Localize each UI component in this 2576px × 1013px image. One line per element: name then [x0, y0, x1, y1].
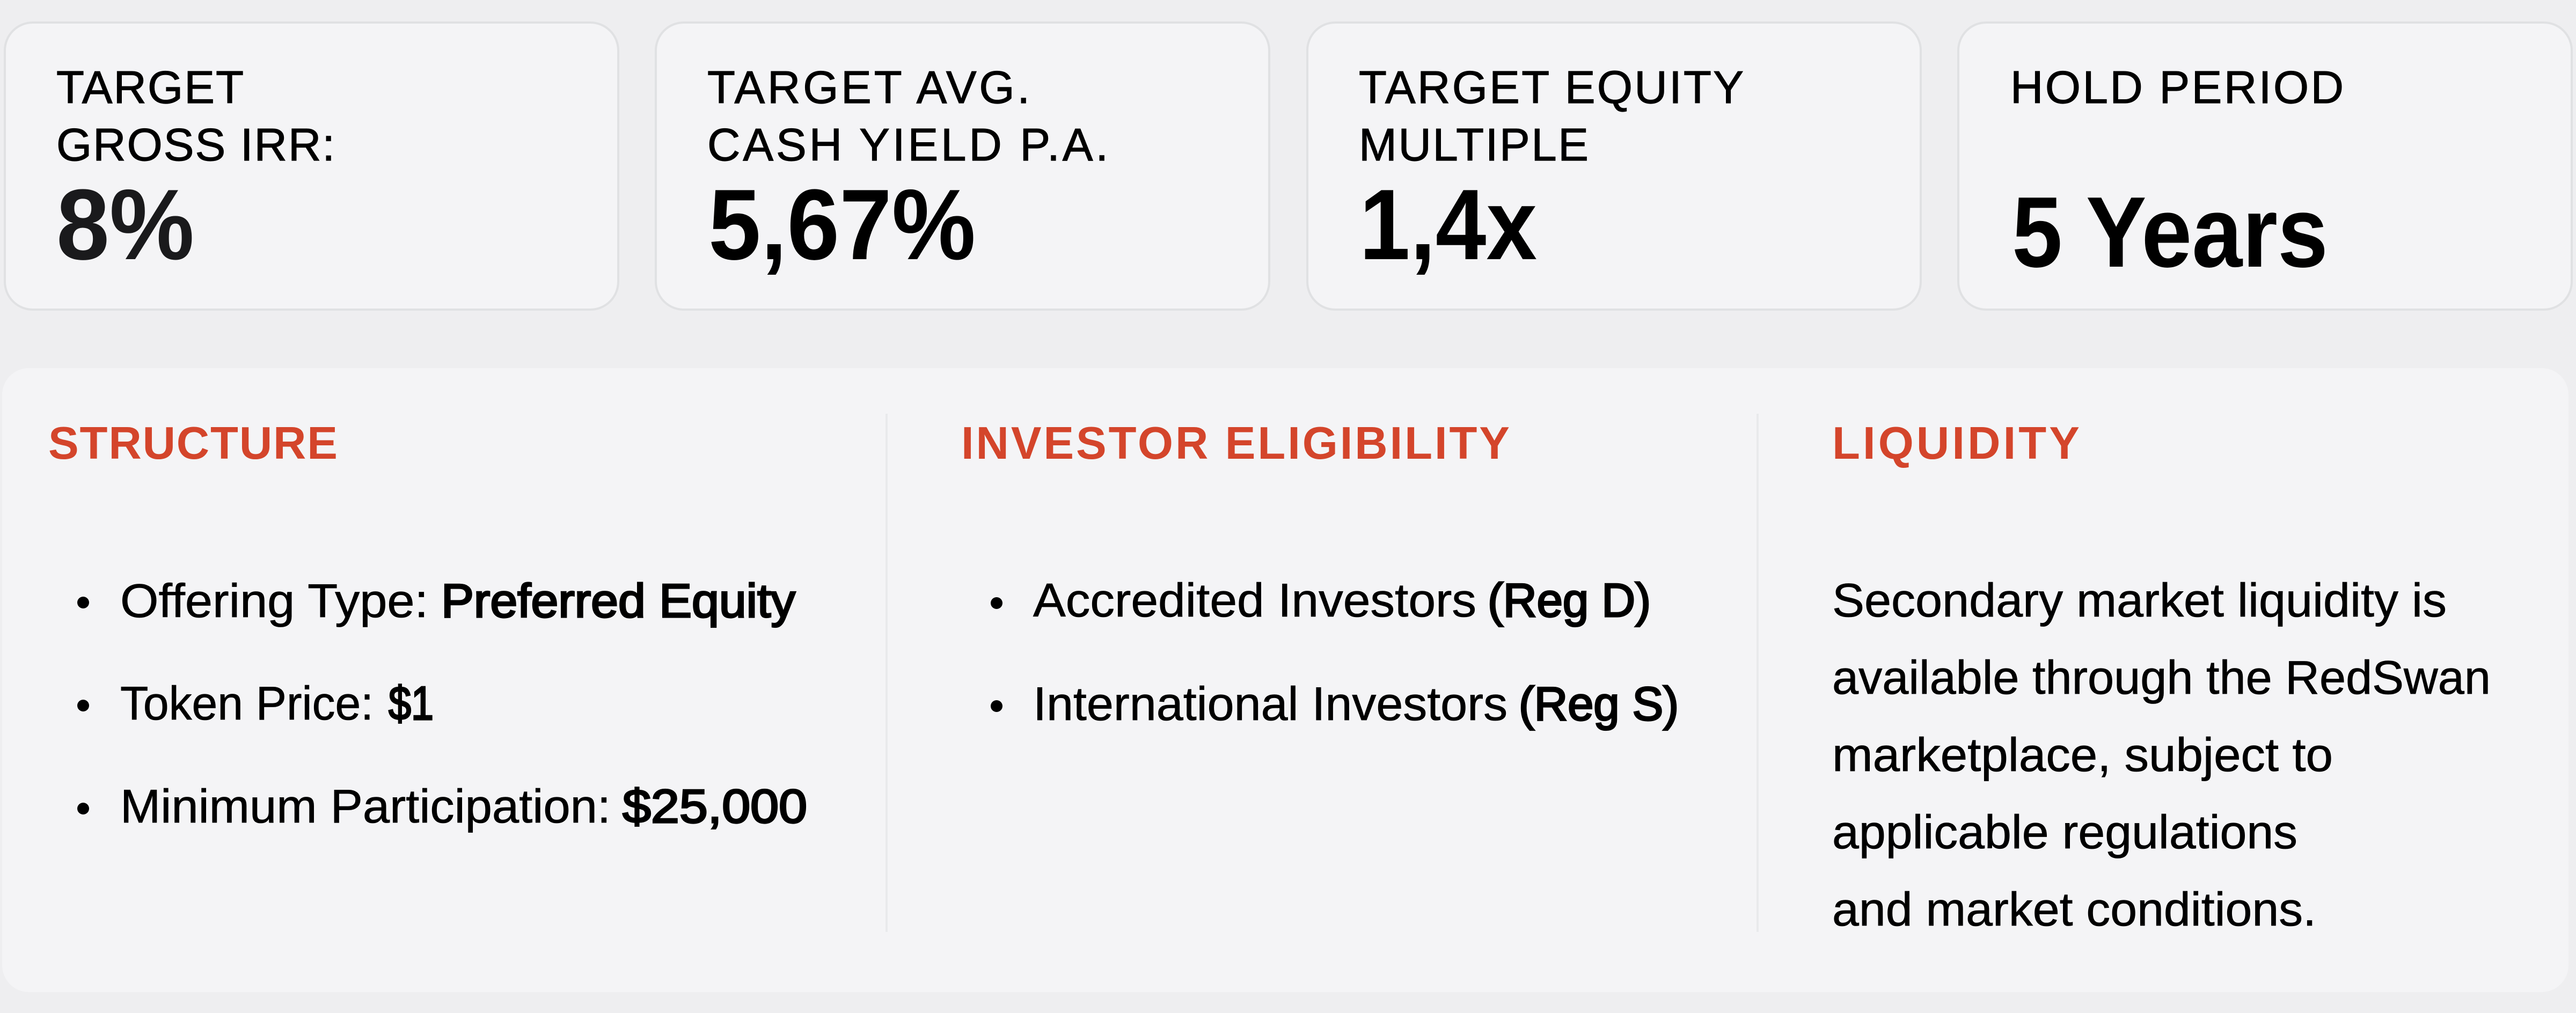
- heading: structure: STRUCTURE: [48, 418, 338, 469]
- list item: minimum participation: Minimum Participation:: [120, 780, 611, 833]
- label: target equity multiple: [1359, 62, 1744, 171]
- value: 1,4x: 1,4x: [1359, 168, 1537, 281]
- list item: offering type: Offering Type:: [120, 574, 428, 627]
- panel: offering details: [2, 368, 2568, 992]
- list item: minimum participation: $25,000: [623, 780, 807, 833]
- list item: international investors: International Investors: [1033, 677, 1507, 730]
- list item: accredited investors: Accredited Investors: [1033, 574, 1476, 627]
- label: target gross IRR: TARGET: [56, 62, 244, 113]
- value: 5 years: 5 Years: [2012, 176, 2328, 288]
- label: target gross IRR: GROSS IRR:: [56, 120, 335, 171]
- text block: liquidity description: available through the RedSwan: [1832, 651, 2491, 704]
- section: structure: [48, 418, 807, 833]
- list item: accredited investors: [991, 574, 1651, 627]
- list item: international investors: (Reg S): [1519, 677, 1679, 730]
- label: target avg. cash yield p.a.: CASH YIELD P.A.: [707, 120, 1108, 171]
- list item: offering type: Preferred Equity: [441, 574, 795, 627]
- text block: liquidity description: marketplace, subject to: [1832, 728, 2333, 781]
- list item: token price: $1: [389, 677, 434, 730]
- list item: accredited investors: (Reg D): [1488, 574, 1651, 627]
- list item: token price: Token Price:: [120, 677, 374, 730]
- text block: liquidity description: [1832, 574, 2491, 936]
- label: target gross IRR: [56, 62, 335, 171]
- text block: liquidity description: applicable regulations: [1832, 805, 2297, 858]
- heading: investor eligibility: INVESTOR ELIGIBILITY: [961, 418, 1510, 469]
- text block: liquidity description: Secondary market liquidity is: [1832, 574, 2447, 627]
- section: liquidity: [1832, 418, 2491, 936]
- label: target equity multiple: MULTIPLE: [1359, 120, 1589, 171]
- label: target avg. cash yield p.a.: [707, 62, 1108, 171]
- label: target equity multiple: TARGET EQUITY: [1359, 62, 1744, 113]
- value: 8%: 8%: [56, 168, 194, 281]
- list item: international investors: [991, 677, 1679, 730]
- panel: target equity multiple card: [1307, 23, 1921, 310]
- list item: offering type: [77, 574, 795, 627]
- panel: target gross IRR card: [5, 23, 618, 310]
- panel: target average cash yield card: [656, 23, 1269, 310]
- label: hold period: HOLD PERIOD: [2010, 62, 2344, 113]
- value: 5,67%: 5,67%: [708, 168, 976, 281]
- panel: hold period card: [1958, 23, 2572, 310]
- text block: liquidity description: and market conditions.: [1832, 883, 2316, 936]
- label: target avg. cash yield p.a.: TARGET AVG.: [707, 62, 1030, 113]
- section: investor eligibility: [961, 418, 1679, 730]
- list item: minimum participation: [77, 780, 807, 833]
- heading: liquidity: LIQUIDITY: [1832, 418, 2080, 469]
